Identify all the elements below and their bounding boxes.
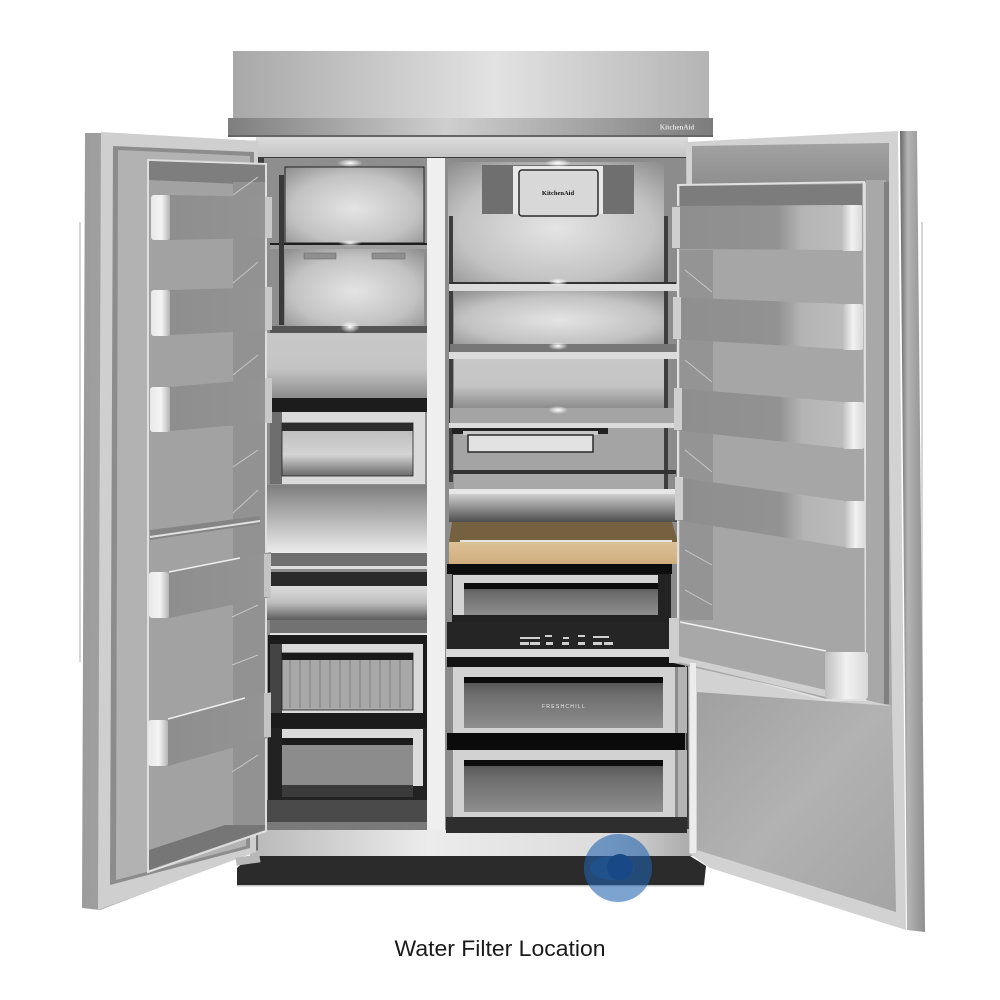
shelf 3 with pan [449,408,675,471]
top trim band [228,118,713,137]
panel: left door [82,132,272,910]
center mullion [427,158,445,830]
top recess [692,143,889,186]
control panel [447,622,670,649]
wall 2 [454,291,664,344]
control housing [482,165,634,216]
dark gap [447,564,672,574]
brand on trim: KitchenAid [660,124,694,132]
freezer lower area [267,586,427,620]
side rail [866,180,892,706]
right bin 4 [675,477,866,548]
freezer mid wall [267,333,427,398]
top tray [149,161,265,185]
fridge floor [446,817,687,833]
top grille [233,51,709,119]
cabinet frame [250,137,696,856]
dark gap 3 [447,733,685,750]
top wall [448,162,664,282]
left bin 1 [151,195,272,240]
lower frame inner edge [690,663,696,853]
bracket chevrons [232,177,258,772]
freezer lower wall [267,485,427,553]
caption: Water Filter Location [394,936,606,961]
freezer basket 3 [268,728,427,800]
hinge [236,854,260,866]
panel: freezer compartment [264,158,427,830]
freezer floor edge [267,822,427,830]
second freezer wall [285,249,424,326]
side rack [279,175,284,325]
door inner column [148,160,266,872]
divider shelf [446,649,671,657]
side racks [449,216,668,516]
brand badge: KitchenAid [542,190,574,197]
right side strip [678,667,687,817]
shelf 4 [449,470,676,494]
bracket chevrons [685,270,712,605]
upper shelf [270,243,427,249]
FreshChill drawer [453,667,675,733]
left bin 2 [151,287,272,336]
lower panel [697,692,896,912]
shelf 2 [449,344,678,361]
bracket strip [680,250,713,620]
panel: right door [669,131,925,932]
top tray [680,184,862,206]
water filter location marker [584,834,652,902]
freezer floor [267,800,427,830]
lower drawer [453,750,675,817]
bottom tray [149,825,265,870]
right bin 1 [672,205,862,251]
door edge [900,131,925,932]
left bin 5 [148,692,271,766]
toe kick [237,856,706,886]
wire shelf 2 [270,553,427,586]
light glints [337,159,571,414]
left rail [150,516,260,540]
right bin 3 [674,388,864,449]
wooden drawer [449,522,678,564]
vents [304,253,405,259]
panel: refrigerator compartment [445,158,687,833]
crisper drawer 1 [452,574,671,622]
upper freezer wall [285,167,424,243]
right bin 2 [672,297,863,350]
FreshChill label: FRESHCHILL [542,704,586,710]
door inner column [678,182,866,700]
wall 5 [449,494,677,522]
shelf 1 [449,282,678,291]
right bin 5 [669,618,868,699]
left bin 3 [150,378,272,432]
freezer basket 1 [268,398,427,484]
freezer basket 2 [268,635,427,728]
wall 3 [454,359,664,408]
dark gap 2 [447,657,685,667]
wire shelf 3 [270,620,427,635]
wire shelf [270,326,427,333]
control buttons [520,635,613,645]
left bin 4 [149,552,271,618]
side trim lines [79,222,923,702]
bracket strip [233,182,265,827]
